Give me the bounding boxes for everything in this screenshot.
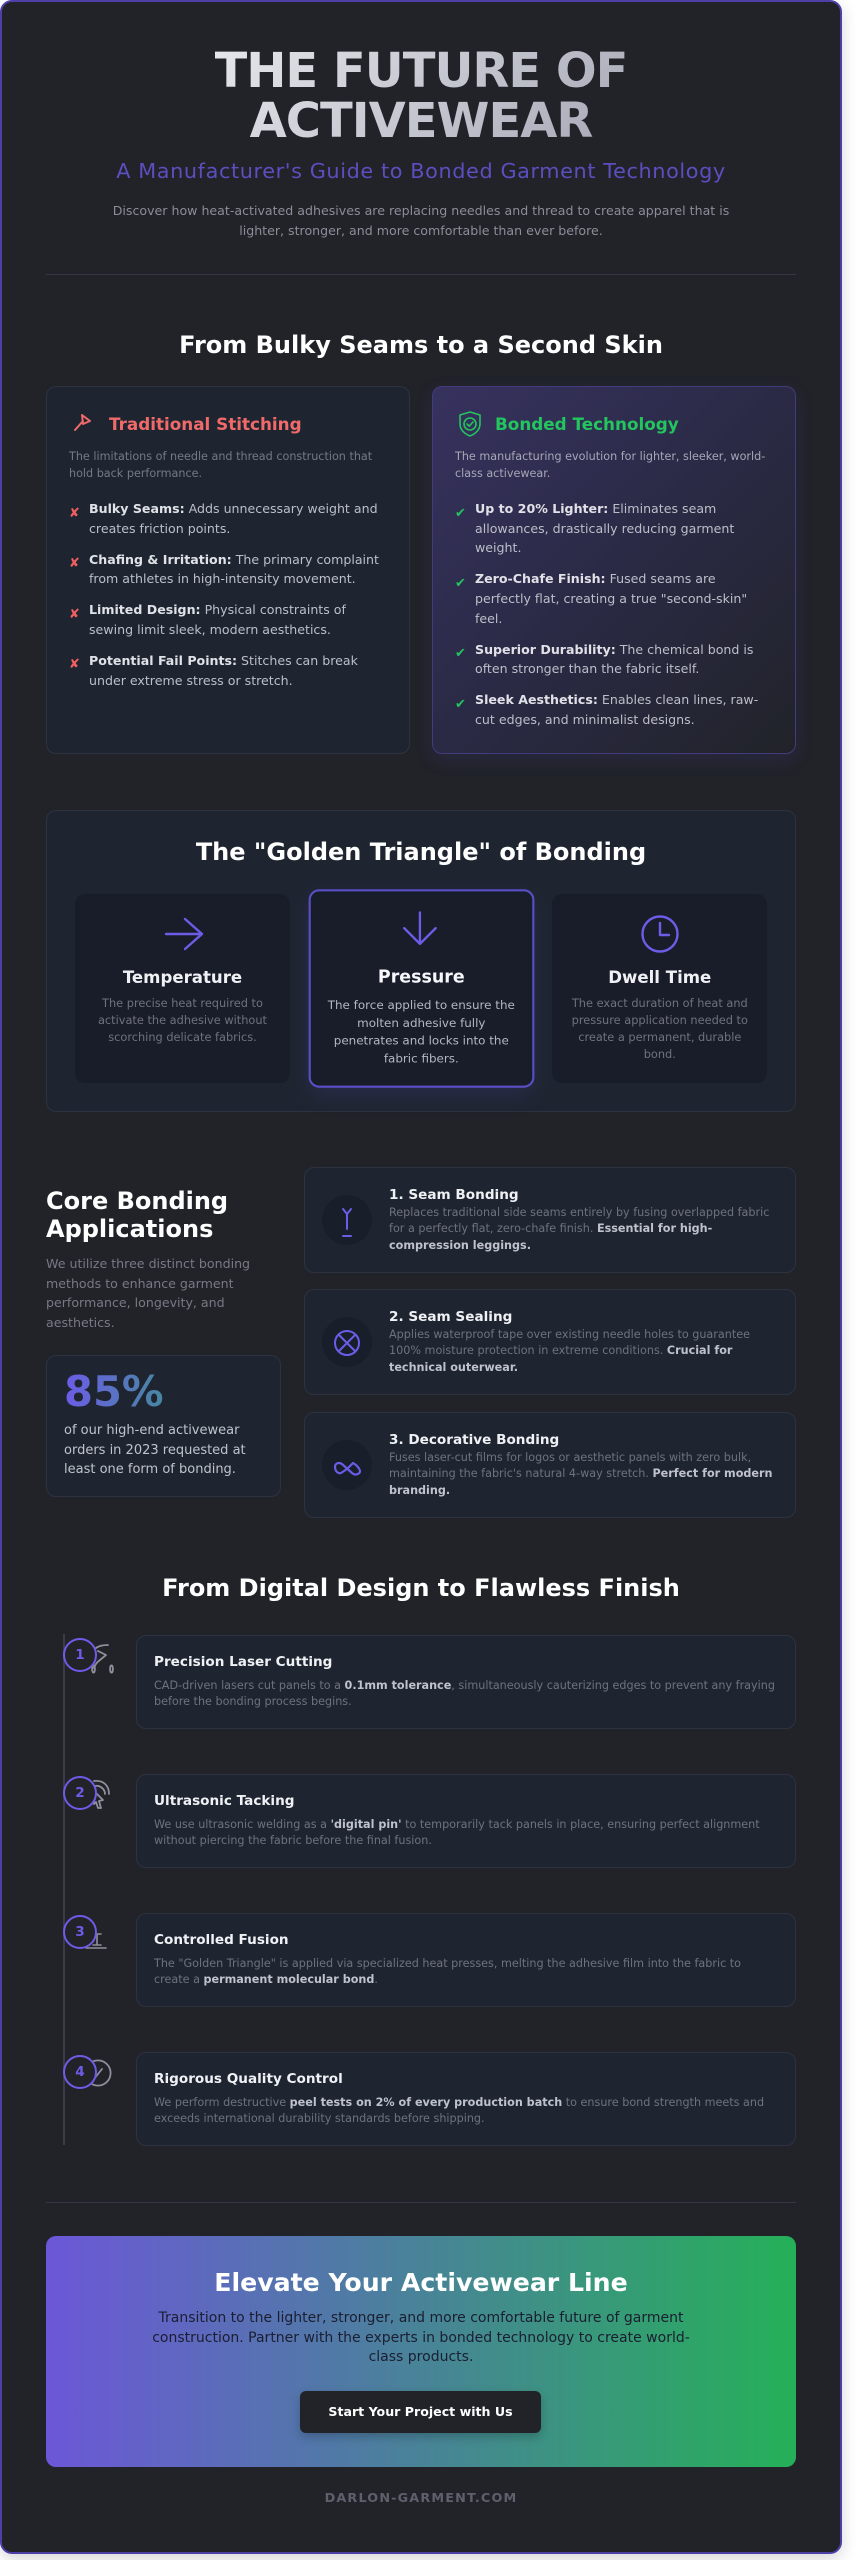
heading: core bonding applications: Core Bonding	[46, 1187, 228, 1215]
text: core bonding intro: We utilize three distinct bonding	[46, 1256, 250, 1271]
label: temperature: Temperature	[123, 968, 242, 987]
text: quality control: exceeds international durability standards before shipping.	[154, 2112, 485, 2125]
card: decorative bonding	[304, 1412, 796, 1518]
intro text	[113, 203, 729, 238]
panel: traditional stitching	[46, 386, 410, 754]
text: quality control: We perform destructive peel tests on 2% of every production batch to ensure bond strength meets and	[154, 2096, 764, 2108]
stat text: orders in 2023 requested at	[64, 1443, 246, 1458]
heading: traditional stitching: Traditional Stitching	[109, 414, 302, 434]
list: stitching problems: under extreme stress or stretch.	[89, 673, 293, 688]
text: temperature: The precise heat required to	[102, 996, 263, 1010]
text: call to action: class products.	[369, 2349, 473, 2365]
text: temperature: activate the adhesive without	[98, 1013, 267, 1027]
list: stitching problems: ✘	[69, 657, 80, 672]
title: seam bonding: 1. Seam Bonding	[389, 1187, 519, 1203]
text: pressure: molten adhesive fully	[357, 1015, 485, 1030]
heading: bulky seams: From Bulky Seams to a Second Skin	[179, 330, 663, 358]
panel: bonded technology	[432, 386, 796, 754]
list: stitching problems: Chafing & Irritation: The primary complaint	[89, 552, 379, 567]
text: controlled fusion: create a permanent molecular bond.	[154, 1973, 378, 1986]
card: laser cutting	[136, 1635, 796, 1729]
heading: core bonding applications: Applications	[46, 1215, 213, 1243]
text: laser cutting: before the bonding process begins.	[154, 1695, 352, 1708]
stat text	[64, 1423, 246, 1477]
text: laser cutting	[154, 1678, 775, 1708]
card: ultrasonic tacking	[136, 1774, 796, 1868]
heading: core bonding applications	[46, 1187, 228, 1243]
list: bonding benefits: weight.	[475, 540, 521, 555]
heading: digital design: From Digital Design to Flawless Finish	[162, 1574, 680, 1602]
card: quality control	[136, 2052, 796, 2146]
list: bonding benefits: ✔	[455, 506, 466, 521]
list: stitching problems: Bulky Seams: Adds unnecessary weight and	[89, 501, 378, 516]
list: stitching problems: ✘	[69, 506, 80, 521]
text: seam bonding: compression leggings.	[389, 1239, 531, 1252]
stat text: least one form of bonding.	[64, 1462, 236, 1477]
step number 4: 4	[75, 2064, 85, 2080]
list: stitching problems: Limited Design: Physical constraints of	[89, 602, 346, 617]
icon: heat press	[85, 1933, 107, 1949]
list: stitching problems: sewing limit sleek, modern aesthetics.	[89, 622, 331, 637]
step number 2	[63, 1776, 97, 1810]
text: core bonding intro: aesthetics.	[46, 1315, 115, 1330]
text: seam sealing: Applies waterproof tape over existing needle holes to guarantee	[389, 1328, 750, 1340]
label: dwell time: Dwell Time	[608, 968, 711, 987]
list: bonding benefits: Sleek Aesthetics: Enables clean lines, raw-	[475, 692, 758, 707]
icon: ultrasonic	[93, 1780, 110, 1809]
icon: quality control	[91, 2060, 112, 2086]
text: pressure: The force applied to ensure the	[327, 997, 515, 1012]
title: THE FUTURE OF	[215, 42, 627, 98]
heading: golden triangle: The "Golden Triangle" of Bonding	[196, 838, 646, 866]
header	[113, 42, 729, 238]
list: bonding benefits: allowances, drastically reducing garment	[475, 521, 734, 536]
text: call to action	[152, 2310, 690, 2365]
title: seam sealing: 2. Seam Sealing	[389, 1309, 512, 1325]
card: controlled fusion	[136, 1913, 796, 2007]
stat number: 85%	[64, 1367, 164, 1416]
icon: decorative bonding	[322, 1440, 372, 1490]
stat: 85 percent	[46, 1355, 281, 1497]
card: dwell time	[552, 894, 767, 1083]
icon: shield check	[459, 411, 481, 437]
text: dwell time: pressure application needed to	[572, 1013, 748, 1027]
text: call to action: construction. Partner with the experts in bonded technology to create world-	[152, 2330, 690, 2346]
title: ultrasonic tacking: Ultrasonic Tacking	[154, 1793, 294, 1809]
description: The manufacturing evolution for lighter, sleeker, world-	[455, 450, 765, 463]
step number 3: 3	[75, 1924, 85, 1940]
list: bonding benefits	[455, 501, 758, 727]
list: bonding benefits: often stronger than the fabric itself.	[475, 661, 699, 676]
list: bonding benefits: cut edges, and minimalist designs.	[475, 712, 695, 727]
title: controlled fusion: Controlled Fusion	[154, 1932, 289, 1948]
description: The limitations of needle and thread construction that	[69, 450, 372, 463]
label: pressure: Pressure	[378, 967, 464, 987]
title: ACTIVEWEAR	[250, 93, 592, 149]
icon: clock	[641, 915, 679, 953]
list: stitching problems: ✘	[69, 607, 80, 622]
text: decorative bonding: maintaining the fabric's natural 4-way stretch. Perfect for modern	[389, 1467, 772, 1480]
description: class activewear.	[455, 467, 550, 480]
title: laser cutting: Precision Laser Cutting	[154, 1654, 332, 1670]
step number 4	[63, 2055, 97, 2089]
title	[215, 42, 627, 149]
text: core bonding intro	[46, 1256, 250, 1330]
card: temperature	[75, 894, 290, 1083]
list: bonding benefits: Up to 20% Lighter: Eliminates seam	[475, 501, 716, 516]
list: bonding benefits: ✔	[455, 576, 466, 591]
text: decorative bonding: branding.	[389, 1484, 450, 1497]
subtitle: A Manufacturer's Guide to Bonded Garment Technology	[116, 159, 726, 183]
icon: seam bonding	[322, 1195, 372, 1245]
timeline line	[63, 1634, 65, 2145]
list: stitching problems: ✘	[69, 556, 80, 571]
text: seam sealing: 100% moisture protection in extreme conditions. Crucial for	[389, 1344, 732, 1357]
text: pressure: penetrates and locks into the	[333, 1033, 508, 1048]
list: stitching problems: Potential Fail Points: Stitches can break	[89, 653, 358, 668]
list: stitching problems: from athletes in high-intensity movement.	[89, 571, 356, 586]
panel: golden triangle	[46, 810, 796, 1112]
icon: needle	[74, 414, 91, 431]
text: seam sealing: technical outerwear.	[389, 1361, 518, 1374]
intro text: Discover how heat-activated adhesives are replacing needles and thread to create apparel that is	[113, 203, 729, 218]
icon: arrow down	[403, 911, 437, 946]
text: dwell time: bond.	[644, 1047, 676, 1061]
list: bonding benefits: Superior Durability: The chemical bond is	[475, 642, 753, 657]
text: pressure	[327, 997, 515, 1066]
text: temperature	[98, 996, 267, 1044]
text: call to action: Transition to the lighter, stronger, and more comfortable future of garment	[158, 2310, 683, 2326]
text: controlled fusion: The "Golden Triangle" is applied via specialized heat presses, melting the adhesive film into the fabric to	[154, 1956, 741, 1970]
text: dwell time: The exact duration of heat and	[572, 996, 748, 1010]
text: seam bonding	[389, 1206, 769, 1252]
step number 1: 1	[75, 1647, 85, 1663]
panel: call to action	[46, 2236, 796, 2467]
card: pressure	[308, 889, 534, 1088]
list: bonding benefits: ✔	[455, 697, 466, 712]
text: pressure: fabric fibers.	[384, 1051, 458, 1066]
list: stitching problems	[69, 501, 379, 688]
card: seam sealing	[304, 1289, 796, 1395]
list: stitching problems: creates friction points.	[89, 521, 230, 536]
text: ultrasonic tacking: We use ultrasonic welding as a 'digital pin' to temporarily tack panels in place, ensuring perfect alignment	[154, 1818, 760, 1830]
text: temperature: scorching delicate fabrics.	[108, 1030, 257, 1044]
text: decorative bonding: Fuses laser-cut films for logos or aesthetic panels with zero bulk,	[389, 1450, 751, 1464]
title: decorative bonding: 3. Decorative Bonding	[389, 1432, 559, 1448]
step number 2: 2	[75, 1785, 85, 1801]
footer: DARLON-GARMENT.COM	[325, 2491, 517, 2506]
text: dwell time	[572, 996, 748, 1061]
text: controlled fusion	[154, 1956, 741, 1986]
description: hold back performance.	[69, 467, 202, 480]
text: laser cutting: CAD-driven lasers cut panels to a 0.1mm tolerance, simultaneously cauterizing edges to prevent any fraying	[154, 1678, 775, 1692]
text: ultrasonic tacking: without piercing the fabric before the final fusion.	[154, 1834, 432, 1847]
text: seam bonding: for a perfectly flat, zero-chafe finish. Essential for high-	[389, 1222, 712, 1235]
description	[69, 450, 372, 480]
text: decorative bonding	[389, 1450, 772, 1497]
button: start your project	[300, 2391, 541, 2433]
text: core bonding intro: methods to enhance garment	[46, 1276, 234, 1291]
list: bonding benefits: perfectly flat, creating a true "second-skin"	[475, 591, 747, 606]
icon: laser cutting	[91, 1644, 114, 1674]
icon: seam sealing	[322, 1317, 372, 1367]
step number 1	[63, 1638, 97, 1672]
list: bonding benefits: feel.	[475, 611, 502, 626]
description	[455, 450, 765, 480]
heading: bonded technology: Bonded Technology	[495, 414, 679, 434]
card: seam bonding	[304, 1167, 796, 1273]
intro text: lighter, stronger, and more comfortable than ever before.	[239, 223, 603, 238]
heading: call to action: Elevate Your Activewear Line	[214, 2268, 628, 2297]
text: quality control	[154, 2096, 764, 2125]
list: bonding benefits: ✔	[455, 646, 466, 661]
text: seam sealing	[389, 1328, 750, 1374]
list: bonding benefits: Zero-Chafe Finish: Fused seams are	[475, 571, 716, 586]
text: dwell time: create a permanent, durable	[578, 1030, 741, 1044]
text: seam bonding: Replaces traditional side seams entirely by fusing overlapped fabric	[389, 1206, 769, 1218]
text: core bonding intro: performance, longevity, and	[46, 1295, 225, 1310]
title: quality control: Rigorous Quality Control	[154, 2071, 343, 2087]
stat text: of our high-end activewear	[64, 1423, 239, 1438]
icon: arrow right	[164, 918, 204, 950]
button: start your project: Start Your Project with Us	[328, 2404, 513, 2419]
text: ultrasonic tacking	[154, 1818, 760, 1847]
step number 3	[63, 1915, 97, 1949]
